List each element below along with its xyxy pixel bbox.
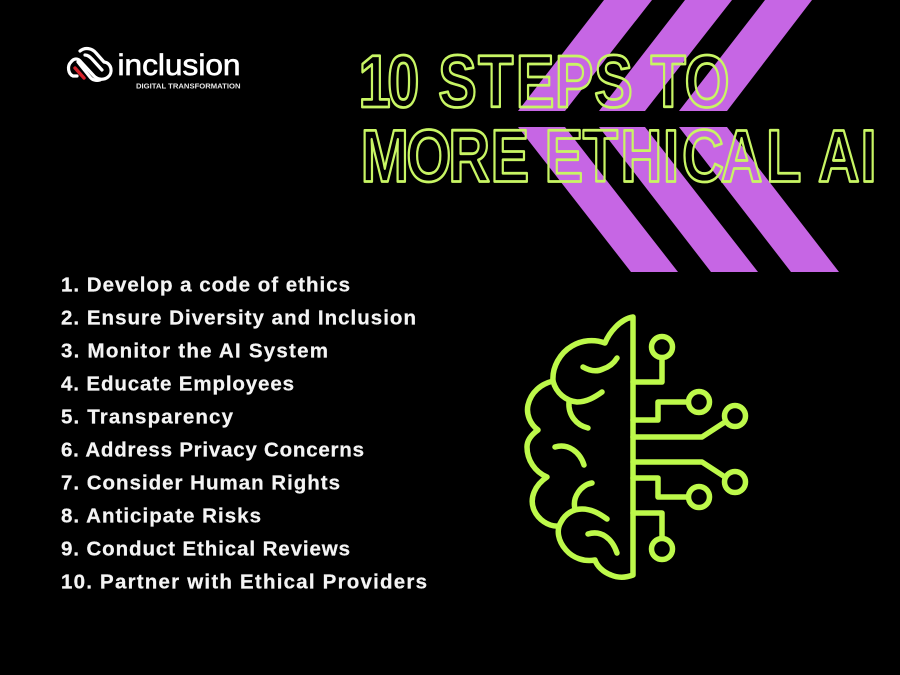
wordmark: inclusion — [118, 49, 240, 82]
decorative chevron stripes — [518, 0, 839, 272]
title: MORE ETHICAL AI — [361, 116, 877, 198]
title: 10 STEPS TO — [358, 41, 730, 124]
icon: cloud logo mark — [69, 49, 111, 80]
circuit nodes — [652, 336, 672, 358]
logo: inclusion digital transformation — [69, 49, 240, 90]
circuit lines — [633, 358, 662, 382]
list of 10 steps: 4. Educate Employees — [61, 372, 294, 396]
tagline: DIGITAL TRANSFORMATION — [136, 82, 240, 90]
list of 10 steps — [61, 274, 427, 594]
list of 10 steps: 7. Consider Human Rights — [61, 472, 340, 494]
list of 10 steps: 8. Anticipate Risks — [61, 504, 261, 528]
list of 10 steps: 1. Develop a code of ethics — [61, 274, 350, 296]
list of 10 steps: 9. Conduct Ethical Reviews — [61, 538, 350, 560]
brain folds — [553, 381, 602, 402]
icon: half brain half circuit — [527, 317, 746, 577]
list of 10 steps: 6. Address Privacy Concerns — [61, 438, 364, 462]
title — [358, 41, 877, 198]
list of 10 steps: 3. Monitor the AI System — [61, 340, 328, 362]
list of 10 steps: 10. Partner with Ethical Providers — [61, 570, 427, 594]
list of 10 steps: 2. Ensure Diversity and Inclusion — [61, 306, 416, 330]
list of 10 steps: 5. Transparency — [61, 406, 234, 428]
brain outline — [527, 317, 633, 577]
